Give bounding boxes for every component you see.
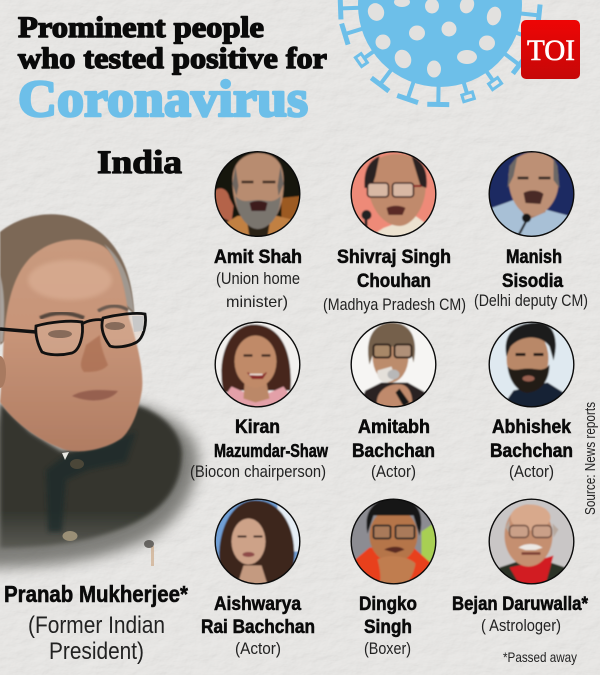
name: Aishwarya [214,594,301,615]
photo [214,322,300,408]
facial features [40,313,84,318]
name: Dingko [359,594,417,615]
name [359,594,417,638]
heading: India: India [97,145,182,181]
name: Rai Bachchan [201,617,315,638]
role: (Union home [216,269,300,288]
person: Shivraj Singh Chouhan [323,151,466,314]
name: Singh [364,617,412,638]
title: Prominent people [18,11,264,44]
label: Pranab Mukherjee: President) [49,638,144,665]
head and face [0,240,142,451]
name [201,594,315,638]
name [352,417,435,462]
source note: Source: News reports [582,402,599,515]
title: who tested positive for [18,42,327,75]
photo [350,322,436,408]
name: Manish [506,247,562,268]
name: Amitabh [358,417,430,438]
icon: coronavirus [338,0,543,107]
role: (Actor) [235,639,281,658]
name [337,247,451,292]
name [214,417,329,461]
name: Amit Shah [214,247,302,268]
person: Abhishek Bachchan [488,322,574,481]
name [502,247,563,292]
name: Kiran [235,417,280,438]
person: Aishwarya Rai Bachchan [201,498,315,658]
name: Sisodia [502,271,563,292]
person: Bejan Daruwalla [452,498,589,635]
role: (Boxer) [364,639,411,658]
role: (Madhya Pradesh CM) [323,295,466,314]
jacket fade [0,400,198,568]
person: Kiran Mazumdar-Shaw [190,322,329,481]
photo [214,498,302,584]
person: Amit Shah [214,151,302,311]
role: (Biocon chairperson) [190,462,326,481]
glasses [0,313,146,355]
title: Coronavirus [18,71,308,128]
portrait: Pranab Mukherjee [0,214,198,568]
name: Abhishek [492,417,571,438]
icon: TOI logo: TOI [527,34,575,67]
name: Bachchan [490,441,573,462]
label: Pranab Mukherjee: Pranab Mukherjee* [4,581,188,607]
photo [350,151,436,237]
footnote: passed away: *Passed away [503,649,577,665]
person: Dingko Singh [350,498,436,658]
role: minister) [226,294,288,311]
role: (Actor) [509,462,554,481]
buttons [70,459,84,469]
role [216,269,300,311]
name: Chouhan [357,271,431,292]
photo [488,151,574,237]
name [490,417,573,462]
name: Shivraj Singh [337,247,451,268]
icon: TOI logo [521,20,580,79]
hair [0,214,134,345]
person: Amitabh Bachchan [350,322,436,481]
role: ( Astrologer) [481,616,561,635]
photo [488,322,574,408]
photo [214,151,300,237]
label: Pranab Mukherjee: (Former Indian [28,612,165,639]
name: Mazumdar-Shaw [214,441,329,461]
role: (Actor) [371,462,416,481]
title [18,11,327,128]
person: Manish Sisodia [474,151,588,310]
name: Bachchan [352,441,435,462]
label: Pranab Mukherjee [4,581,188,665]
photo [488,498,574,584]
photo [350,498,436,586]
